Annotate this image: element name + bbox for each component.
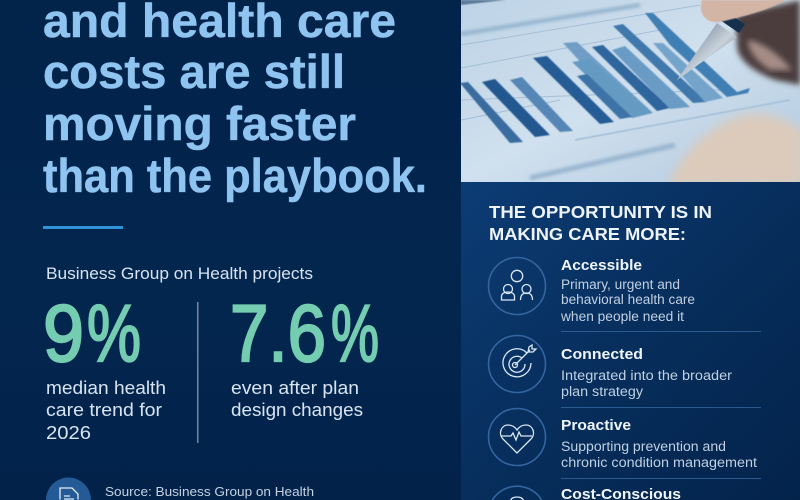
- stat: 7.6%: %: [331, 289, 379, 379]
- pen: [677, 23, 737, 80]
- stat: 9%: care trend for: [46, 400, 162, 420]
- item: proactive: Supporting prevention and: [561, 439, 726, 454]
- source note: Source: Business Group on Health: [105, 484, 314, 499]
- stat: 9%: 9: [43, 289, 84, 379]
- item: proactive: chronic condition management: [561, 455, 757, 470]
- accent rule: [43, 226, 123, 229]
- stat: 7.6%: [230, 289, 379, 420]
- headline: costs are still: [43, 45, 345, 98]
- stat: 9%: 2026: [46, 423, 91, 443]
- headline: than the playbook.: [43, 149, 427, 202]
- right panel background: [461, 182, 800, 500]
- item: proactive: [488, 408, 757, 470]
- icon: people: [488, 258, 546, 314]
- left panel background: [0, 0, 461, 500]
- item: accessible: behavioral health care: [561, 292, 695, 307]
- blurred hand bottom: [668, 114, 800, 186]
- item: accessible: when people need it: [560, 309, 684, 324]
- dark hand: [735, 0, 800, 85]
- stat: 9%: %: [87, 289, 141, 379]
- divider: [561, 407, 761, 408]
- item: connected: [488, 336, 733, 399]
- intro text: Business Group on Health projects: [46, 264, 313, 283]
- photo: chart and pen: [460, 0, 800, 186]
- divider: [561, 478, 761, 479]
- item: accessible: Primary, urgent and: [561, 277, 680, 292]
- panel heading: THE OPPORTUNITY IS IN: [489, 202, 712, 222]
- stat: 9%: median health: [46, 378, 166, 398]
- item: connected: Connected: [561, 346, 643, 363]
- panel heading: MAKING CARE MORE:: [489, 224, 686, 244]
- divider: [561, 331, 761, 332]
- stat: 7.6%: 7.6: [230, 289, 326, 379]
- item: accessible: [488, 257, 695, 324]
- stat: 7.6%: even after plan: [231, 378, 359, 398]
- item: cost-conscious: [492, 486, 681, 500]
- panel heading: [489, 202, 712, 244]
- finger: [701, 0, 785, 22]
- source note: [46, 478, 314, 500]
- stat: 7.6%: design changes: [231, 400, 363, 420]
- icon: target: [488, 336, 546, 392]
- item: proactive: Proactive: [561, 417, 631, 434]
- item: connected: Integrated into the broader: [561, 368, 733, 383]
- icon: heart: [488, 408, 546, 466]
- headline: moving faster: [43, 97, 356, 150]
- stat: 9%: [43, 289, 166, 443]
- headline: [43, 0, 427, 202]
- stat divider: [197, 302, 198, 443]
- item: accessible: Accessible: [561, 257, 642, 274]
- icon: cost: [492, 486, 542, 500]
- item: connected: plan strategy: [561, 384, 643, 399]
